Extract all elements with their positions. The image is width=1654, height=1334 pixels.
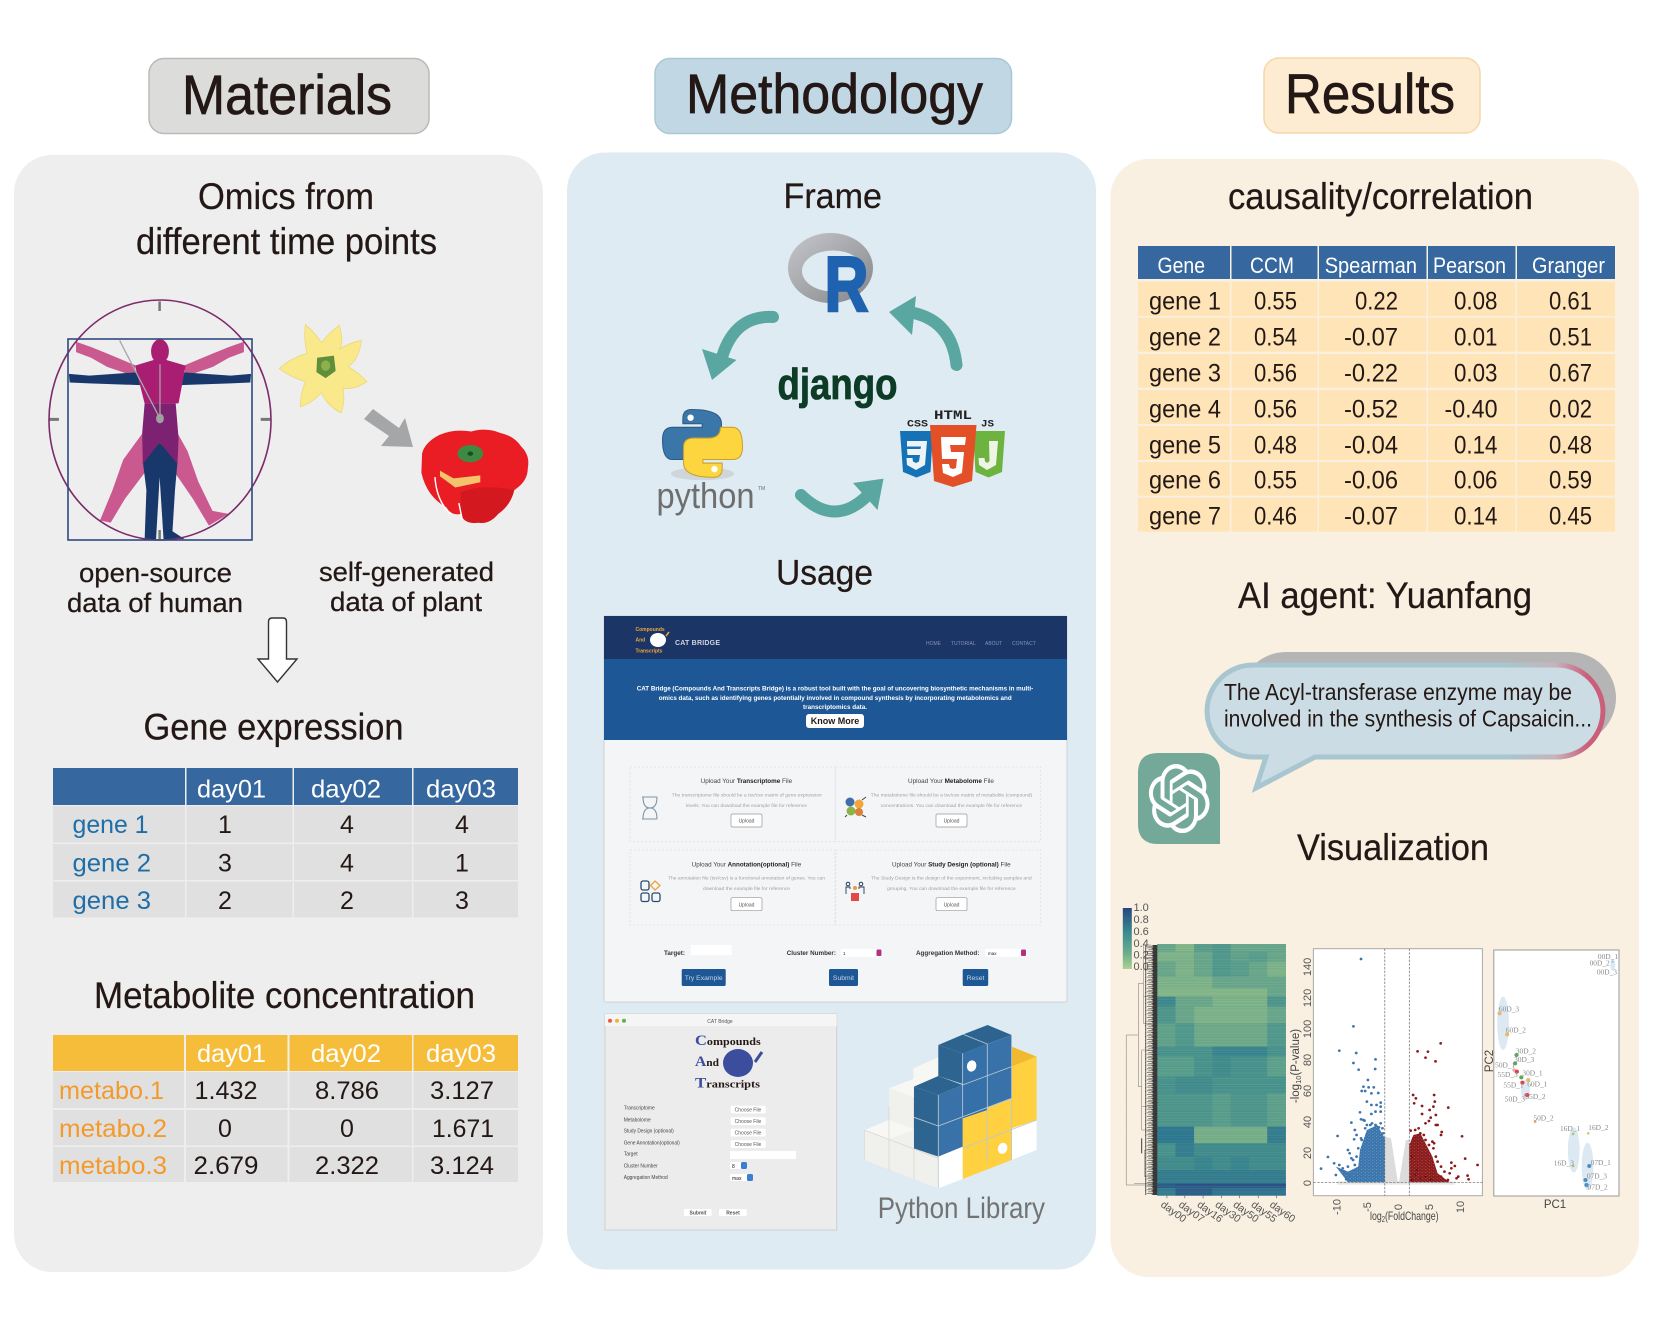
PCA points and labels: 07D_3: [1587, 1173, 1607, 1181]
label: open-source data of human: open-source: [79, 558, 232, 588]
table: gene expression: 4: [340, 850, 354, 878]
table: causality and correlation: gene 6: [1149, 466, 1221, 494]
upload cards: Upload Your Study Design (optional) File: [892, 862, 1011, 869]
table: causality and correlation: 0.61: [1549, 287, 1592, 315]
upload cards: Upload Your Metabolome File: [908, 778, 994, 785]
heading button: Materials: Materials: [182, 63, 392, 126]
icon: R logo: [788, 233, 873, 328]
table: causality and correlation: -0.52: [1344, 396, 1398, 424]
upload cards: The annotation file (tsv/csv) is a functional annotation of genes. You can: [668, 875, 825, 880]
table: causality and correlation: 0.08: [1454, 287, 1498, 315]
icon: human clock figure: [49, 301, 270, 539]
volcano y axis: 20: [1302, 1147, 1314, 1159]
upload cards: [630, 767, 1041, 925]
PCA points and labels: 16D_3: [1554, 1159, 1574, 1167]
table: causality and correlation: 0.03: [1454, 360, 1498, 388]
table: causality and correlation: gene 4: [1149, 396, 1221, 424]
panel: Materials: [14, 155, 543, 1272]
upload cards: The metabolome file should be a tsv/csv matrix of metabolite (compound): [871, 793, 1033, 798]
table: metabolite concentration: 3.124: [430, 1152, 494, 1180]
table: causality and correlation: -0.22: [1344, 360, 1398, 388]
table: causality and correlation: 0.67: [1549, 360, 1592, 388]
table: causality and correlation: -0.06: [1344, 466, 1398, 494]
website nav: [926, 641, 1036, 647]
table: causality and correlation: gene 7: [1149, 502, 1221, 530]
heading button: Materials: [149, 58, 429, 134]
volcano y axis: 80: [1302, 1054, 1314, 1066]
chart: clustered heatmap: [1123, 902, 1298, 1225]
PCA axis labels: PC2: [1484, 1050, 1496, 1072]
PCA points and labels: 55D_2: [1525, 1093, 1546, 1101]
PCA points and labels: 60D_1: [1527, 1081, 1548, 1089]
upload cards: levels. You can download the example file for reference: [686, 803, 807, 808]
table: metabolite concentration: 2.679: [194, 1152, 258, 1180]
volcano y axis: 0: [1302, 1180, 1314, 1186]
logo: CSS HTML JS shields: HTML: [934, 408, 972, 423]
table: causality and correlation: 0.56: [1254, 360, 1297, 388]
table: metabolite concentration: day03: [426, 1040, 496, 1068]
heading: Frame: Frame: [784, 177, 882, 216]
table: gene expression: gene 2: [72, 850, 151, 878]
upload cards: Upload: [739, 902, 755, 908]
arrow: flower to fruit: [364, 409, 413, 447]
volcano x axis: 2: [1382, 1215, 1385, 1224]
heatmap column labels: day30: [1213, 1199, 1243, 1225]
table: metabolite concentration: day01: [197, 1040, 266, 1068]
heading button: Methodology: Methodology: [686, 62, 983, 125]
icon: ChatGPT logo: [1138, 753, 1220, 844]
web form row: Aggregation Method:: [916, 950, 979, 957]
web form buttons: Submit: [833, 975, 854, 982]
PCA points and labels: 30D_3: [1514, 1056, 1535, 1064]
heading: Omics from different time points: Omics from: [198, 176, 374, 217]
volcano y axis: 140: [1302, 958, 1314, 976]
volcano y axis: -log: [1290, 1084, 1302, 1103]
square frame: [68, 339, 252, 540]
app form controls: 8: [732, 1164, 735, 1170]
table: gene expression: 4: [455, 811, 469, 839]
label: self-generated data of plant: [319, 557, 494, 617]
PCA points and labels: 16D_2: [1588, 1124, 1609, 1132]
PCA points and labels: 55D_3: [1498, 1071, 1518, 1079]
app form labels: Metabolome: [624, 1117, 651, 1123]
logo: django: django: [778, 360, 898, 409]
panel: Methodology: [567, 152, 1096, 1270]
app form labels: Target: [624, 1152, 638, 1158]
PCA points and labels: 07D_1: [1591, 1159, 1611, 1167]
volcano x axis: -10: [1332, 1199, 1344, 1215]
heatmap colour bar: 0.2: [1134, 950, 1149, 962]
app form controls: Submit: [690, 1210, 707, 1216]
upload cards: Upload Your Annotation(optional) File: [692, 862, 802, 869]
table: causality and correlation: 0.14: [1454, 502, 1498, 530]
volcano x axis: 5: [1424, 1204, 1436, 1210]
upload cards: The transcriptome file should be a tsv/csv matrix of gene expression: [672, 793, 822, 798]
speech bubble: [1207, 652, 1616, 788]
website nav: TUTORIAL: [951, 641, 976, 647]
button: Know More: Know More: [811, 716, 859, 726]
table: causality and correlation: -0.40: [1444, 396, 1498, 424]
table: causality and correlation: 0.55: [1254, 287, 1297, 315]
app form controls: Choose File: [735, 1119, 762, 1125]
table: causality and correlation: -0.07: [1344, 502, 1398, 530]
icon: red pepper fruit: [421, 430, 528, 523]
website nav: CONTACT: [1012, 641, 1036, 647]
PCA points and labels: 07D_2: [1588, 1183, 1608, 1191]
table: metabolite concentration: 2.322: [315, 1152, 379, 1180]
label: open-source data of human: data of human: [67, 588, 243, 618]
table: gene expression: day02: [311, 776, 381, 804]
heatmap column labels: day00: [1158, 1199, 1189, 1225]
upload cards: grouping. You can download the example file for reference: [887, 886, 1016, 891]
app logo: And: [695, 1054, 719, 1070]
table: causality and correlation: gene 3: [1149, 360, 1221, 388]
volcano y axis: [1290, 958, 1314, 1186]
website logo: And: [636, 638, 645, 644]
app logo: Transcripts: [695, 1076, 761, 1092]
PCA points and labels: 50D_2: [1533, 1115, 1554, 1123]
icon: R logo: R: [824, 240, 868, 328]
app form controls: Choose File: [735, 1108, 762, 1114]
table: gene expression: 3: [218, 850, 232, 878]
heatmap colour bar: 0.0: [1134, 961, 1149, 973]
app form labels: [624, 1106, 680, 1181]
arrow: down: [258, 618, 297, 682]
arrow: python to HTML: [801, 479, 884, 512]
website nav: ABOUT: [985, 641, 1002, 647]
icon: molecules: [845, 797, 866, 817]
table: metabolite concentration: 8.786: [315, 1077, 379, 1105]
speech bubble: involved in the synthesis of Capsaicin...: [1224, 706, 1592, 732]
logo: python: python: [656, 475, 754, 516]
heatmap column labels: day07: [1176, 1199, 1207, 1225]
volcano y axis: 100: [1302, 1020, 1314, 1038]
volcano y axis: 40: [1302, 1116, 1314, 1128]
screenshot: CAT Bridge desktop app: CAT Bridge: [707, 1019, 733, 1025]
logo: CSS HTML JS shields: [900, 408, 1005, 487]
heading button: Results: Results: [1285, 62, 1455, 125]
table: causality and correlation: gene 1: [1149, 287, 1221, 315]
PCA points and labels: 00D_3: [1597, 968, 1617, 976]
table: causality and correlation: 0.14: [1454, 431, 1498, 459]
screenshot: CAT Bridge web server: [604, 616, 1067, 1002]
PCA points and labels: 16D_1: [1560, 1125, 1580, 1133]
app form labels: Cluster Number: [624, 1163, 658, 1169]
website hero text: CAT Bridge (Compounds And Transcripts Bridge) is a robust tool built with the goal of uncovering biosynthetic mechanisms in multi-: [637, 686, 1033, 693]
volcano x axis: (FoldChange): [1385, 1209, 1439, 1223]
website hero text: [637, 686, 1033, 711]
heatmap cells: [1126, 944, 1286, 1198]
web form row: max: [988, 951, 997, 956]
icon: DNA: [642, 797, 657, 819]
website logo: Compounds: [636, 627, 665, 633]
web form buttons: Reset: [967, 975, 984, 982]
heatmap colour bar: 1.0: [1134, 902, 1149, 914]
icon: yellow pepper flower: [279, 324, 367, 413]
web form row: [664, 945, 1027, 957]
upload cards: Upload: [944, 819, 960, 825]
arrow: HTML to R: [889, 296, 956, 365]
logo: python: [656, 409, 765, 516]
upload cards: The Study Design is the design of the experiment, including samples and: [871, 875, 1032, 880]
web form row: Cluster Number:: [787, 950, 836, 957]
table: causality and correlation: Spearman: [1325, 253, 1417, 278]
table: gene expression: 3: [455, 887, 469, 915]
table: gene expression: 2: [218, 887, 232, 915]
volcano x axis: -5: [1362, 1202, 1374, 1212]
upload cards: Upload Your Transcriptome File: [701, 778, 793, 785]
web form buttons: Try Example: [685, 975, 723, 982]
website logo: Transcripts: [636, 648, 663, 654]
circle of the clock: [49, 300, 271, 540]
heatmap colour bar: 0.8: [1134, 914, 1149, 926]
PCA points and labels: 50D_1: [1495, 1062, 1516, 1070]
PCA axis labels: PC1: [1544, 1199, 1566, 1211]
heading: AI agent: Yuanfang: AI agent: Yuanfang: [1238, 575, 1532, 616]
panel: Results: [1110, 159, 1639, 1277]
website logo: [636, 627, 720, 654]
table: causality and correlation: Gene: [1158, 253, 1205, 278]
table: causality and correlation: Granger: [1532, 253, 1605, 278]
table: causality and correlation: 0.45: [1549, 502, 1592, 530]
upload cards: Upload: [739, 819, 755, 825]
app form controls: Reset: [726, 1210, 740, 1216]
table: causality and correlation: gene 5: [1149, 431, 1221, 459]
icon: study design people: [846, 882, 864, 901]
screenshot: CAT Bridge desktop app: [605, 1014, 837, 1230]
PCA axis labels: [1484, 1050, 1566, 1211]
table: metabolite concentration: [53, 1035, 518, 1182]
label: open-source data of human: [67, 558, 243, 618]
table: causality and correlation: 0.59: [1549, 466, 1592, 494]
table: metabolite concentration: metabo.3: [59, 1152, 167, 1180]
app logo: Compounds: [695, 1033, 761, 1049]
table: metabolite concentration: 1.432: [194, 1077, 258, 1105]
heatmap column labels: day60: [1267, 1199, 1298, 1225]
table: causality and correlation: 0.01: [1454, 324, 1498, 352]
table: metabolite concentration: metabo.2: [59, 1115, 167, 1143]
heatmap colour bar: 0.6: [1134, 926, 1149, 938]
web form buttons: [682, 969, 988, 986]
heading: Usage: Usage: [776, 554, 873, 592]
app form labels: Study Design (optional): [624, 1129, 674, 1135]
PCA points and labels: 55D_1: [1503, 1081, 1524, 1089]
app form controls: Choose File: [735, 1130, 762, 1136]
table: causality and correlation: 0.54: [1254, 324, 1297, 352]
app logo: [695, 1033, 762, 1092]
logo: python: TM: [758, 486, 765, 492]
PCA points and labels: 30D_2: [1516, 1048, 1536, 1056]
heatmap colour bar: [1123, 902, 1149, 973]
label: Python Library: Python Library: [878, 1192, 1045, 1225]
heading: Visualization: Visualization: [1297, 827, 1489, 868]
table: metabolite concentration: 3.127: [430, 1077, 494, 1105]
table: causality and correlation: 0.48: [1549, 431, 1592, 459]
heatmap column labels: day55: [1249, 1199, 1279, 1225]
icon: annotation squares: [641, 881, 660, 902]
volcano y axis: 10: [1294, 1076, 1303, 1084]
app form controls: [684, 1106, 796, 1216]
table: gene expression: day01: [197, 776, 266, 804]
chart: volcano plot: [1290, 949, 1482, 1224]
table: causality and correlation: 0.51: [1549, 324, 1592, 352]
table: gene expression: 1: [218, 811, 232, 839]
website hero text: transcriptomics data.: [803, 704, 867, 711]
table: metabolite concentration: 0: [340, 1115, 354, 1143]
table: causality and correlation: 0.22: [1355, 287, 1398, 315]
table: gene expression: gene 1: [72, 811, 148, 839]
table: causality and correlation: [1138, 246, 1615, 532]
icon: Python library cubes: [864, 1025, 1037, 1188]
volcano x axis: [1332, 1199, 1467, 1224]
table: causality and correlation: -0.07: [1344, 324, 1398, 352]
upload cards: Upload: [944, 902, 960, 908]
web form row: 1: [843, 951, 846, 956]
table: gene expression: gene 3: [72, 887, 151, 915]
table: causality and correlation: 0.56: [1254, 396, 1297, 424]
table: causality and correlation: 0.46: [1254, 502, 1297, 530]
table: gene expression: [53, 768, 518, 918]
heading: Metabolite concentration: Metabolite concentration: [94, 975, 475, 1016]
volcano x axis: log: [1370, 1209, 1386, 1223]
web form row: Target:: [664, 950, 685, 957]
volcano points: [1313, 949, 1482, 1196]
arrow: R to python: [702, 317, 773, 380]
heatmap column labels: day50: [1231, 1199, 1261, 1225]
heatmap column labels: day16: [1195, 1199, 1225, 1225]
table: causality and correlation: gene 2: [1149, 324, 1221, 352]
logo: CSS HTML JS shields: JS: [981, 420, 994, 430]
PCA points and labels: 00D_2: [1590, 960, 1610, 968]
table: metabolite concentration: day02: [311, 1040, 381, 1068]
volcano y axis: 60: [1302, 1085, 1314, 1097]
upload cards: concentrations. You can download the example file for reference: [881, 803, 1023, 808]
table: causality and correlation: CCM: [1250, 253, 1294, 278]
app form labels: Aggregation Method: [624, 1175, 668, 1181]
speech bubble: The Acyl-transferase enzyme may be: [1224, 679, 1572, 705]
PCA points and labels: 50D_3: [1505, 1095, 1525, 1103]
website logo: CAT BRIDGE: [675, 640, 720, 647]
heading: Omics from different time points: different time points: [136, 221, 437, 262]
app form labels: Transcriptome: [624, 1106, 655, 1112]
PCA points and labels: 00D_1: [1598, 953, 1618, 961]
chart: PCA plot: [1484, 950, 1619, 1211]
website hero text: omics data, such as identifying genes potentially involved in compound synthesis by incorporating metabolomics and: [659, 695, 1012, 702]
upload cards: download the example file for reference: [703, 886, 790, 891]
table: metabolite concentration: 0: [218, 1115, 232, 1143]
logo: CSS HTML JS shields: CSS: [907, 420, 928, 430]
table: causality and correlation: Pearson: [1433, 253, 1506, 278]
volcano y axis: 120: [1302, 989, 1314, 1007]
volcano x axis: 10: [1455, 1201, 1467, 1213]
volcano x axis: 0: [1393, 1204, 1405, 1210]
heading: causality/correlation: causality/correlation: [1228, 176, 1533, 217]
heatmap dendrogram: [1126, 945, 1157, 1195]
volcano y axis: (P-value): [1290, 1029, 1302, 1076]
PCA points and labels: 60D_3: [1499, 1005, 1519, 1013]
website nav: HOME: [926, 641, 942, 647]
heatmap colour bar: 0.4: [1134, 938, 1149, 950]
app form controls: max: [732, 1176, 742, 1182]
table: causality and correlation: 0.06: [1454, 466, 1498, 494]
PCA points and labels: 30D_1: [1522, 1069, 1543, 1077]
label: self-generated data of plant: self-generated: [319, 557, 494, 587]
table: gene expression: 4: [340, 811, 354, 839]
table: gene expression: day03: [426, 776, 496, 804]
table: causality and correlation: 0.02: [1549, 396, 1592, 424]
table: causality and correlation: 0.48: [1254, 431, 1297, 459]
table: causality and correlation: -0.04: [1344, 431, 1398, 459]
button: Know More: [806, 714, 864, 728]
PCA points and labels: [1495, 953, 1618, 1191]
table: causality and correlation: 0.55: [1254, 466, 1297, 494]
app form controls: Choose File: [735, 1142, 762, 1148]
table: gene expression: 1: [455, 850, 469, 878]
heading: Omics from different time points: [136, 176, 437, 262]
app form labels: Gene Annotation(optional): [624, 1140, 680, 1146]
table: metabolite concentration: 1.671: [432, 1115, 494, 1143]
heading: Gene expression: Gene expression: [144, 706, 404, 748]
heatmap column labels: [1158, 1199, 1298, 1225]
label: self-generated data of plant: data of plant: [330, 587, 483, 617]
table: metabolite concentration: metabo.1: [59, 1077, 164, 1105]
PCA points and labels: 60D_2: [1506, 1027, 1526, 1035]
table: gene expression: 2: [340, 887, 354, 915]
